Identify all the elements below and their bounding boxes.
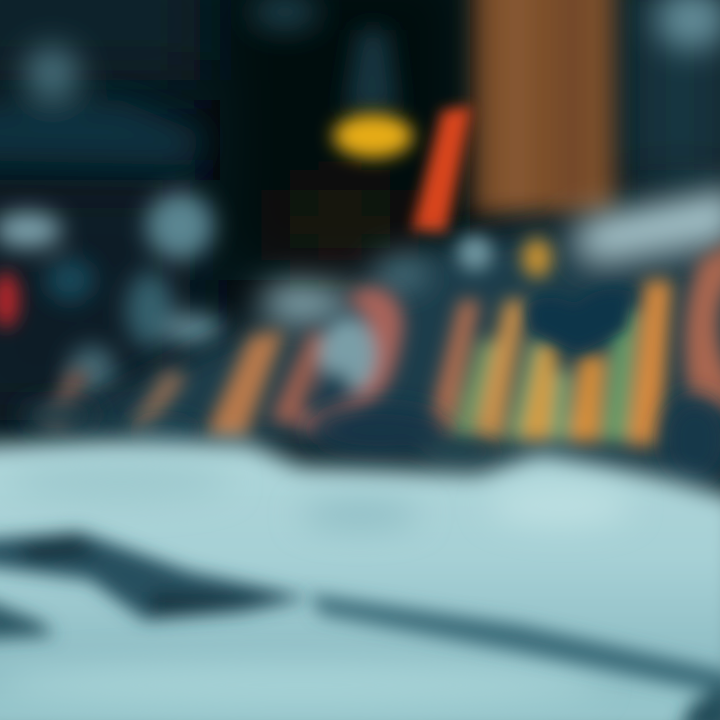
wooden facade [474, 0, 614, 215]
dark base of wall [20, 396, 720, 484]
lamp: yellow glow [333, 114, 413, 158]
wall: dark heart shape [527, 289, 632, 352]
tire track: long diagonal line [310, 594, 720, 720]
building: left pale windows [0, 192, 223, 394]
lamp shade [345, 30, 398, 112]
building: left dark roof shape [0, 0, 720, 165]
tire track: dark bottom-left shapes [0, 532, 310, 640]
orange red stripe [412, 106, 472, 234]
wall: painted stripes [40, 235, 672, 445]
light: small red glow at left edge [0, 272, 19, 328]
wall: right edge curve [684, 240, 720, 415]
snow: shading [0, 462, 630, 709]
wall: painted band base [30, 186, 720, 480]
snow: foreground ground [0, 440, 720, 720]
